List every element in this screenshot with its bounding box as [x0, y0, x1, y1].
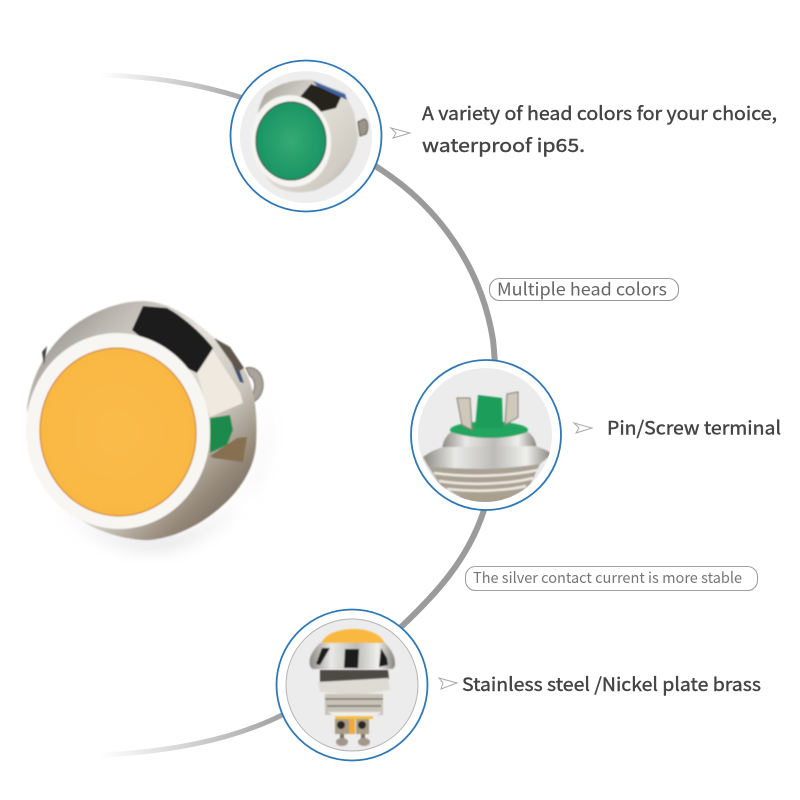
arrow marker 3: [439, 678, 457, 689]
metal housing: [27, 301, 256, 540]
feature circle 3: stainless button side view: [276, 610, 428, 760]
heading: stainless steel: Stainless steel /Nickel plate brass: [462, 671, 761, 697]
nut: [318, 678, 390, 695]
dark reflection on housing: [132, 306, 213, 373]
arrow marker 2: [574, 423, 592, 433]
right terminal: [505, 392, 518, 425]
light facet: [197, 350, 243, 417]
left terminal: [335, 719, 349, 746]
green reflection: [210, 415, 233, 453]
dark facet: [300, 84, 342, 112]
left terminal: [457, 398, 472, 430]
right terminal: [356, 719, 370, 746]
lower brown facet: [210, 437, 247, 462]
nut bottom: [460, 496, 512, 502]
yellow dome: [32, 340, 204, 524]
dark right edge: [214, 338, 244, 372]
housing: [256, 80, 358, 192]
small left reflection: [42, 346, 47, 365]
bezel: [245, 90, 337, 192]
thread body: [325, 694, 383, 715]
feature circle 1: green head button: [230, 60, 382, 212]
blue facet: [313, 81, 347, 100]
heading: pin/screw terminal: Pin/Screw terminal: [607, 414, 781, 440]
drop shadow: [60, 385, 267, 549]
blue reflection: [230, 359, 244, 383]
stud: [358, 119, 368, 136]
dome housing: [310, 643, 395, 669]
green actuator: [475, 395, 503, 428]
heading: head colors: A variety of head colors for your choice,: [422, 100, 777, 126]
dome: [442, 431, 538, 448]
dark neck: [320, 670, 389, 682]
curved connector line: [100, 75, 496, 755]
terminal base: [335, 716, 373, 719]
yellow head: [321, 629, 385, 644]
thread: [428, 464, 540, 497]
green dome: [256, 102, 326, 180]
label: multiple head colors: Multiple head colors: [497, 276, 667, 302]
dark reflections: [316, 648, 388, 668]
green base: [450, 422, 528, 438]
heading: head colors: [422, 100, 777, 158]
neck: [328, 712, 382, 718]
label: silver contact: The silver contact current is more stable: [473, 567, 742, 588]
heading: head colors: waterproof ip65.: [422, 132, 585, 158]
white bezel: [16, 324, 220, 538]
flange: [423, 446, 552, 469]
arrow marker 1: [391, 128, 410, 138]
main product photo: yellow push button: [16, 301, 267, 549]
terminal insulator: [349, 719, 355, 734]
feature circle 2: pin terminal: [411, 360, 561, 510]
rear pin: [246, 367, 263, 401]
